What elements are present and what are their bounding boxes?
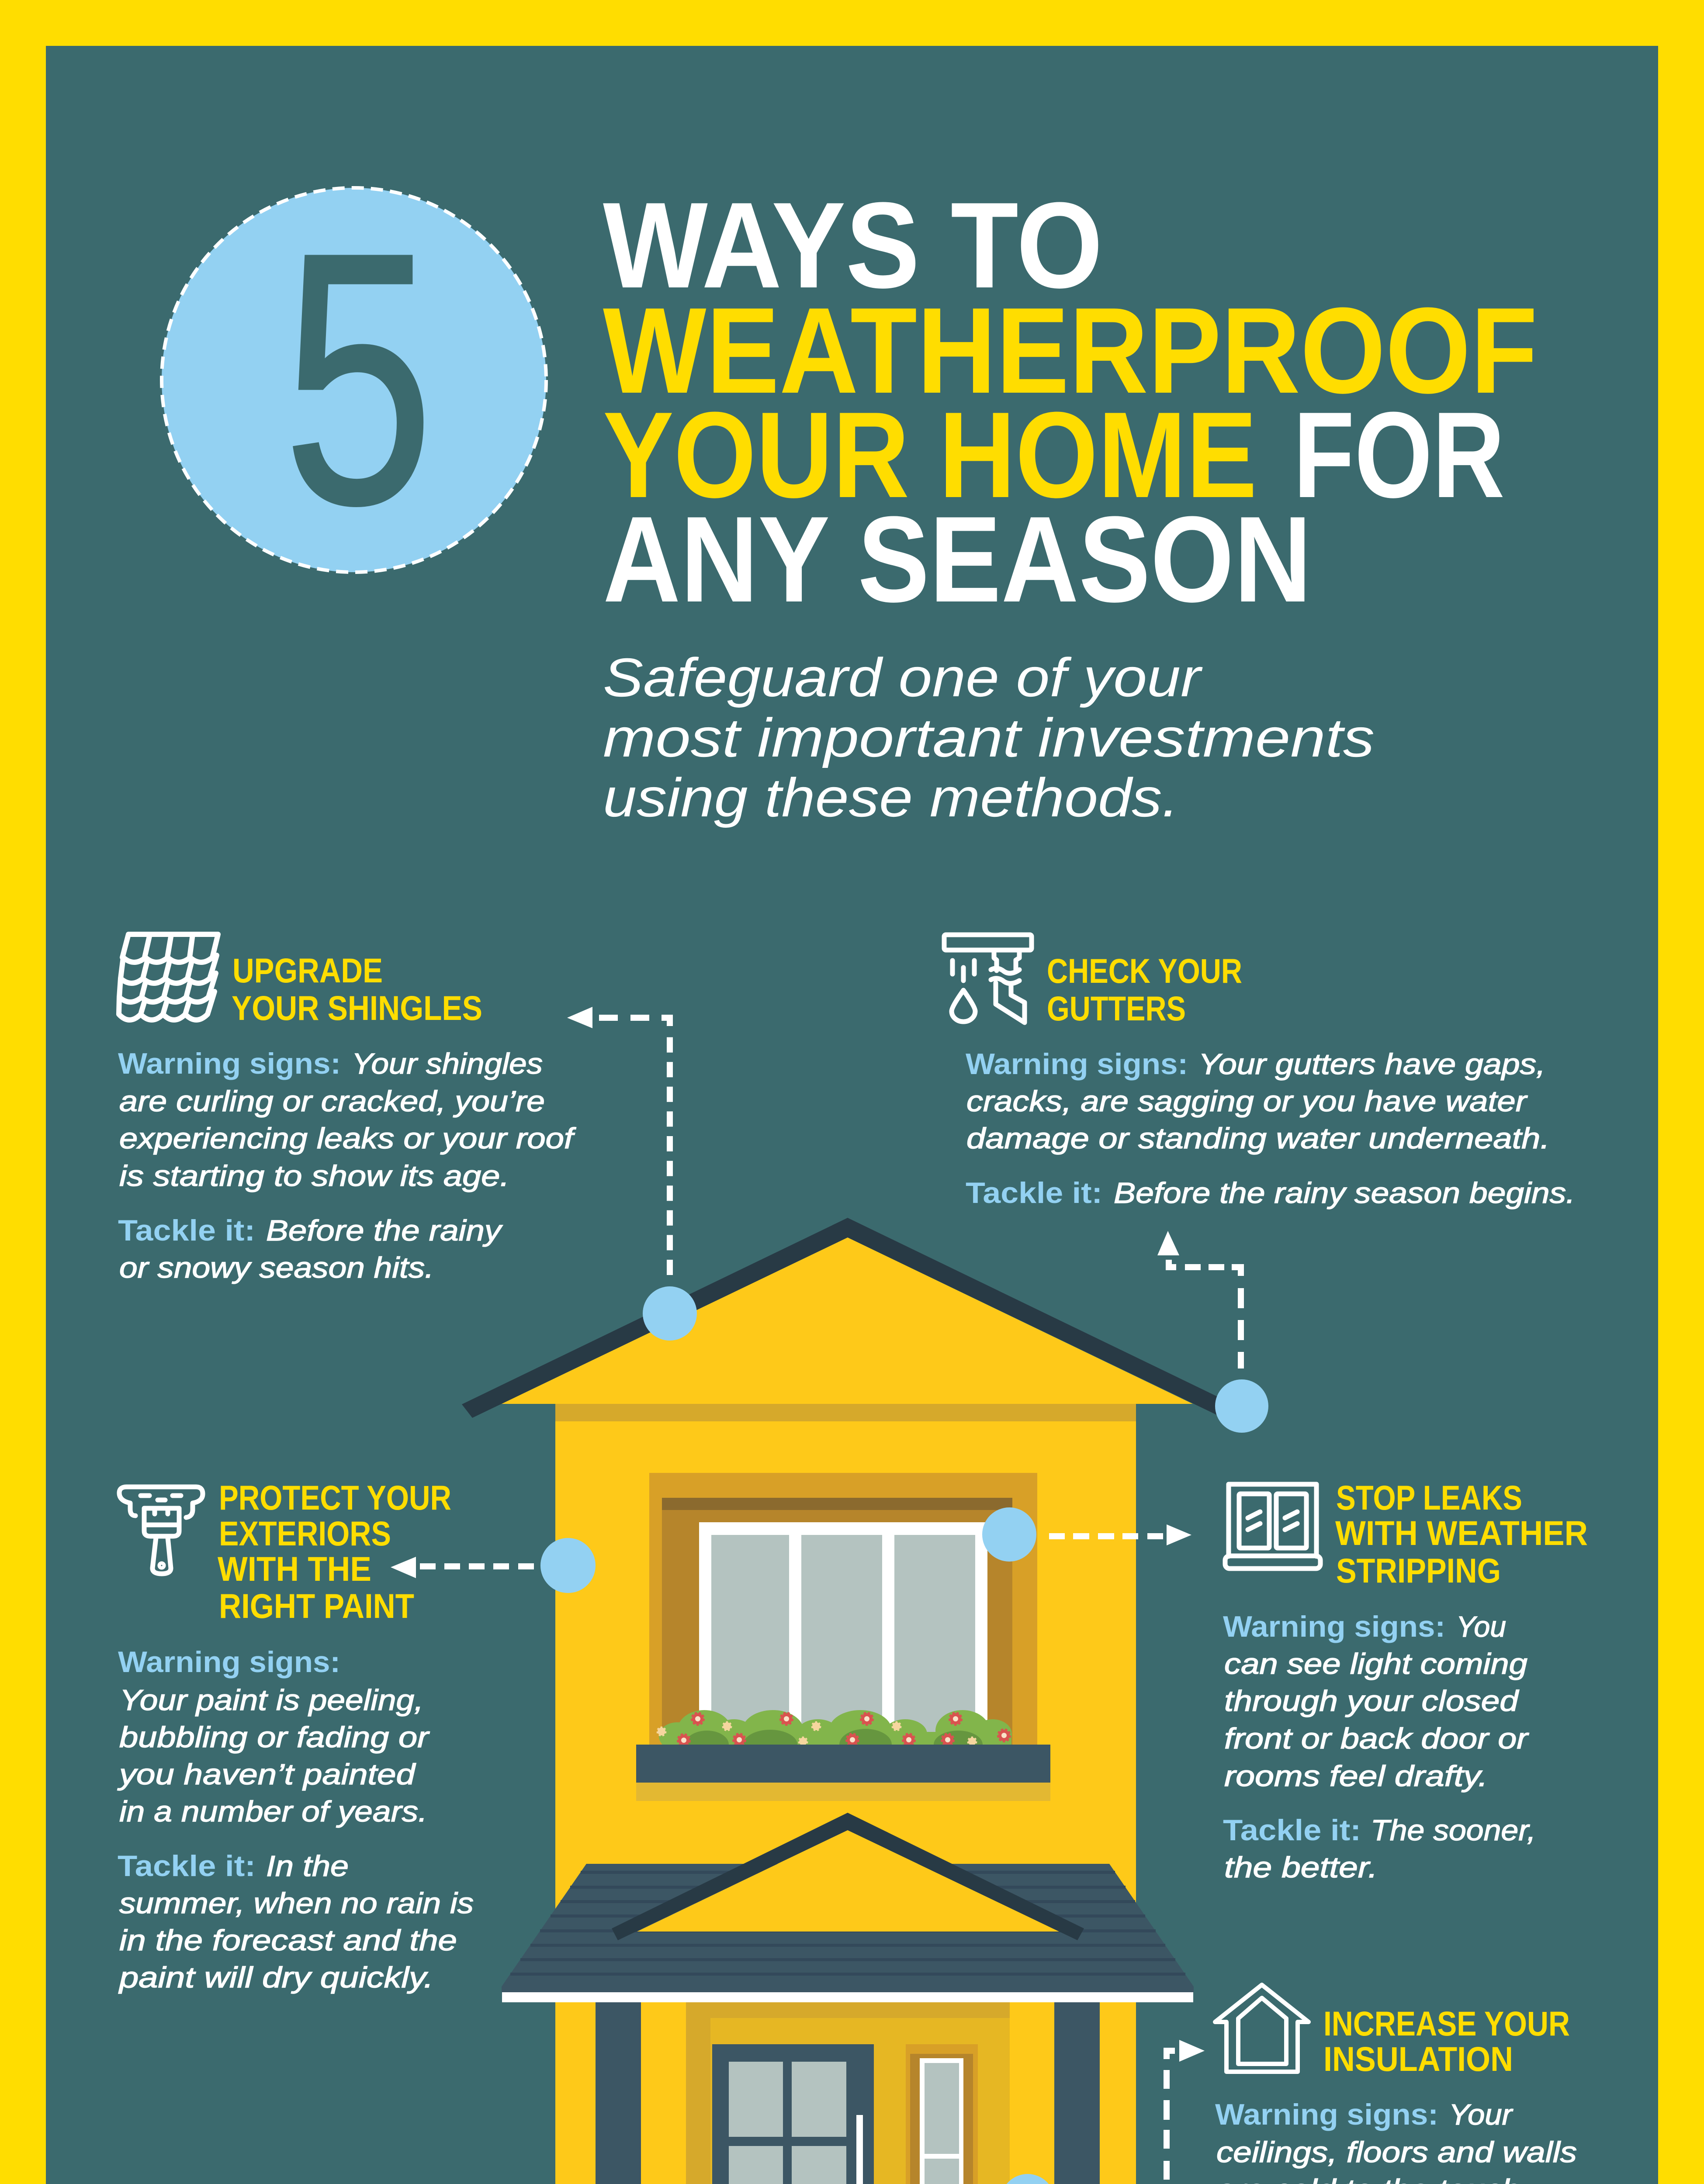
heading: PROTECT YOUR [219, 1478, 451, 1517]
number badge: 5: 5 [283, 179, 434, 578]
subtitle: using these methods. [603, 767, 1179, 828]
number badge: 5 [162, 179, 546, 578]
warning signs text: Your [1449, 2098, 1514, 2131]
warning signs text [1223, 1610, 1529, 1793]
tackle it text: In the [266, 1850, 349, 1883]
heading: YOUR SHINGLES [232, 988, 482, 1027]
icon: window [1225, 1484, 1320, 1569]
tackle it text: The sooner, [1371, 1814, 1536, 1847]
heading [1047, 951, 1242, 1028]
warning signs text: Warning signs: [118, 1645, 340, 1679]
heading [1335, 1478, 1588, 1590]
warning signs text: in a number of years. [119, 1795, 427, 1828]
tackle it text: paint will dry quickly. [118, 1961, 433, 1994]
upper wall [555, 1404, 1136, 2184]
subtitle [603, 647, 1375, 828]
warning signs text: cracks, are sagging or you have water [966, 1085, 1528, 1118]
heading: CHECK YOUR [1047, 951, 1242, 990]
heading: STOP LEAKS [1336, 1478, 1522, 1517]
warning signs text: Warning signs: [966, 1047, 1188, 1081]
warning signs text: Your shingles [352, 1047, 543, 1080]
tackle it text: Before the rainy [266, 1214, 503, 1247]
tackle it text [1223, 1814, 1536, 1884]
heading: EXTERIORS [219, 1514, 391, 1553]
title: YOUR HOME [603, 387, 1257, 523]
tackle it text [966, 1176, 1575, 1209]
main roof gable [502, 1237, 1193, 1404]
heading: RIGHT PAINT [219, 1586, 414, 1625]
arrow: insulation callout [1001, 2040, 1205, 2184]
heading: INCREASE YOUR [1323, 2004, 1570, 2043]
icon: broken gutter [944, 935, 1032, 1023]
warning signs text [117, 1645, 430, 1828]
warning signs text [118, 1047, 576, 1192]
title: WAYS TO [603, 177, 1103, 314]
tackle it text [118, 1214, 503, 1284]
title: ANY SEASON [603, 491, 1312, 628]
warning signs text: Warning signs: [118, 1047, 341, 1080]
arrow: paint callout [391, 1538, 596, 1593]
upper window with flower box [636, 1473, 1050, 1801]
porch roof [502, 1813, 1194, 2002]
warning signs text: ceilings, floors and walls [1216, 2136, 1577, 2169]
heading: UPGRADE [232, 951, 383, 990]
warning signs text: Warning signs: [1215, 2098, 1438, 2131]
tackle it text: Tackle it: [118, 1849, 256, 1883]
entry frame [686, 2002, 1010, 2184]
heading: GUTTERS [1047, 989, 1186, 1028]
arrow: gutters callout [1157, 1231, 1268, 1433]
tackle it text: the better. [1224, 1851, 1378, 1884]
planter box [636, 1745, 1050, 1783]
eave shadow band [555, 1404, 1136, 1421]
heading: STRIPPING [1336, 1551, 1501, 1590]
house illustration [462, 1218, 1233, 2184]
icon: roof shingles [119, 934, 218, 1020]
heading: WITH WEATHER [1335, 1514, 1588, 1552]
tackle it text: Tackle it: [1223, 1814, 1361, 1847]
icon: paint brush [119, 1487, 203, 1574]
heading [1323, 2004, 1570, 2078]
heading [232, 951, 482, 1027]
tackle it text [118, 1849, 474, 1994]
tackle it text: Tackle it: [966, 1176, 1102, 1209]
warning signs text: can see light coming [1224, 1648, 1527, 1680]
warning signs text: bubbling or fading or [119, 1721, 430, 1754]
front door [712, 2044, 874, 2184]
warning signs text [1215, 2098, 1593, 2184]
tackle it text: summer, when no rain is [119, 1887, 474, 1920]
side window [906, 2044, 978, 2184]
arrow: shingles callout [567, 1007, 697, 1341]
warning signs text: are curling or cracked, you’re [119, 1085, 545, 1118]
warning signs text: through your closed [1224, 1685, 1520, 1717]
tackle it text: Before the rainy season begins. [1114, 1177, 1575, 1209]
section: increase your insulation [1215, 1985, 1593, 2184]
warning signs text: You [1456, 1610, 1506, 1643]
warning signs text: Your paint is peeling, [120, 1684, 423, 1717]
title: WEATHERPROOF [603, 283, 1538, 419]
heading: INSULATION [1323, 2039, 1513, 2078]
warning signs text: experiencing leaks or your roof [119, 1122, 576, 1155]
arrow: weather stripping callout [982, 1507, 1191, 1562]
tackle it text: or snowy season hits. [119, 1251, 434, 1284]
tackle it text: Tackle it: [118, 1214, 255, 1247]
main roof ridge [462, 1218, 1233, 1418]
porch columns [596, 2002, 1100, 2184]
icon: insulated house [1215, 1985, 1309, 2072]
section: protect your exteriors [117, 1478, 474, 1994]
warning signs text: you haven’t painted [117, 1758, 416, 1791]
subtitle: Safeguard one of your [603, 647, 1203, 708]
warning signs text: rooms feel drafty. [1224, 1760, 1488, 1793]
warning signs text: is starting to show its age. [119, 1160, 509, 1192]
section: upgrade your shingles [118, 934, 576, 1284]
warning signs text: Your gutters have gaps, [1198, 1048, 1545, 1081]
heading: WITH THE [218, 1549, 371, 1588]
warning signs text [966, 1047, 1550, 1155]
warning signs text: damage or standing water underneath. [966, 1122, 1550, 1155]
tackle it text: in the forecast and the [119, 1924, 457, 1957]
warning signs text: Warning signs: [1223, 1610, 1445, 1643]
warning signs text: front or back door or [1224, 1722, 1529, 1755]
title [603, 177, 1538, 628]
flower bushes [659, 1710, 1012, 1760]
heading [218, 1478, 451, 1625]
flowers [658, 1713, 1010, 1746]
section: stop leaks with weather stripping [1223, 1478, 1588, 1884]
title: FOR [1293, 387, 1505, 523]
subtitle: most important investments [603, 708, 1375, 768]
section: check your gutters [944, 935, 1575, 1209]
